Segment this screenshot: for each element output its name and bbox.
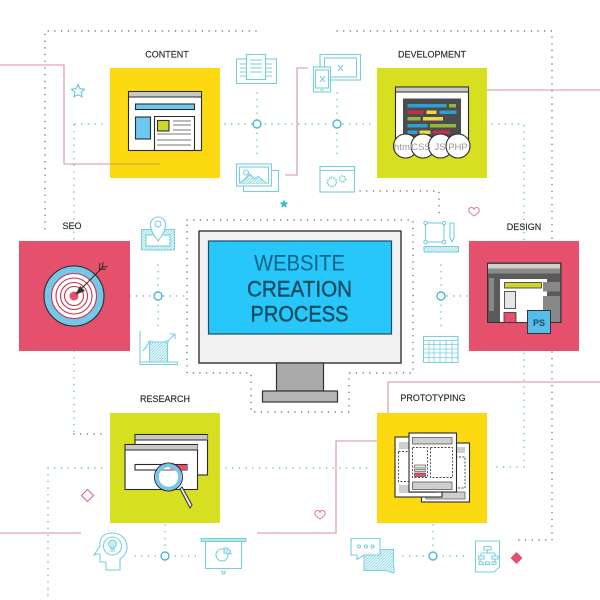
title: CREATION (247, 276, 352, 302)
icon: heart bottom (315, 511, 325, 519)
icon: content page (128, 92, 202, 151)
red connector lines (0, 65, 600, 533)
dotted connectors (45, 31, 552, 598)
icon: settings window (320, 166, 354, 192)
icon: filled diamond (510, 552, 522, 564)
heading: content: CONTENT (145, 50, 189, 60)
panel: content (110, 50, 220, 178)
icon: presentation board (201, 538, 246, 574)
title: WEBSITE (254, 250, 345, 276)
title (247, 250, 352, 326)
icon: transform and pencil (424, 221, 458, 252)
panel: prototyping (377, 393, 487, 523)
icon: wireframes (395, 433, 470, 502)
icon: code window: CSS (411, 142, 431, 153)
icon: map pin (142, 217, 174, 250)
heading: seo: SEO (62, 221, 82, 231)
icon: head with bulb (94, 533, 127, 570)
monitor (199, 231, 401, 402)
icon: code window: JS (434, 142, 446, 153)
icon: target (44, 262, 108, 326)
connector nodes (154, 120, 445, 560)
panel: design (469, 222, 579, 351)
icon: chat bubbles (351, 538, 394, 573)
icon: heart top right (469, 208, 479, 216)
panel: research (110, 394, 220, 523)
icon: growth chart (140, 331, 178, 364)
heading: research: RESEARCH (140, 394, 190, 404)
heading: prototyping: PROTOTYPING (400, 393, 466, 403)
icon: table (424, 336, 458, 362)
icon: filled star (280, 200, 288, 208)
title: PROCESS (250, 302, 348, 326)
icon: images (236, 164, 278, 192)
icon: sitemap document (476, 541, 500, 572)
icon: code window: html (394, 142, 412, 153)
icon: star (72, 84, 84, 97)
icon: code window: PHP (448, 142, 468, 153)
icon: outline diamond (82, 490, 94, 502)
icon: documents (236, 54, 276, 84)
icon: responsive devices (314, 54, 360, 92)
heading: design: DESIGN (507, 222, 541, 232)
panel: seo (19, 221, 130, 351)
icon: code window (394, 87, 470, 158)
heading: development: DEVELOPMENT (398, 50, 467, 60)
panel: development (377, 50, 487, 178)
icon: ps tag: PS (533, 318, 545, 328)
icon: search windows (125, 434, 208, 508)
